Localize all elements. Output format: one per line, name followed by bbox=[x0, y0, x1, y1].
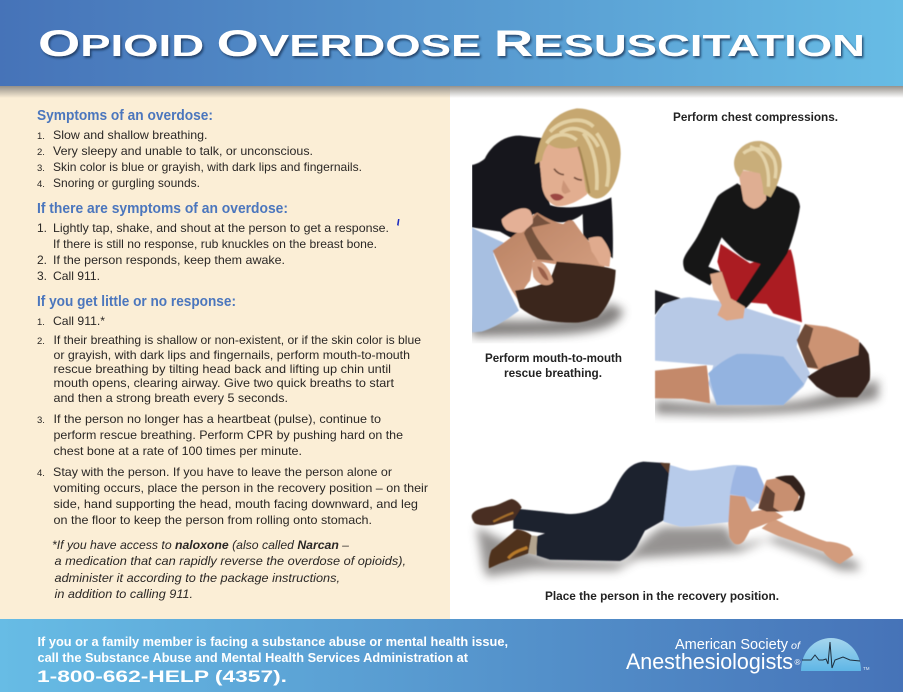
photo: mouth-to-mouth rescue breathing bbox=[472, 108, 623, 337]
stray blue mark bbox=[397, 219, 400, 226]
symptom list: 1. bbox=[37, 131, 45, 142]
caption: chest compressions: Perform chest compressions. bbox=[673, 112, 838, 124]
response list: 2. bbox=[37, 253, 47, 267]
heading: little or no response: If you get little or no response: bbox=[37, 294, 236, 310]
naloxone note: administer it according to the package instructions, bbox=[54, 571, 340, 585]
symptom list: 3. bbox=[37, 163, 45, 174]
section: little or no response bbox=[37, 294, 428, 527]
response list: If there is still no response, rub knuckles on the breast bone. bbox=[53, 237, 377, 251]
response list: If the person responds, keep them awake. bbox=[53, 253, 285, 267]
symptom list: 4. bbox=[37, 179, 45, 190]
helpline text: call the Substance Abuse and Mental Health Services Administration at bbox=[38, 650, 469, 665]
caption: mouth-to-mouth: rescue breathing. bbox=[504, 368, 602, 380]
rescuer hands bbox=[502, 208, 533, 233]
step 2: and then a strong breath every 5 seconds. bbox=[54, 391, 288, 405]
extended arm bbox=[762, 518, 853, 564]
patient belt bbox=[655, 290, 681, 315]
step 3: 3. bbox=[37, 415, 45, 426]
sleeve bbox=[730, 466, 764, 504]
patient ear bbox=[532, 261, 553, 285]
response list: Lightly tap, shake, and shout at the person to get a response. bbox=[53, 221, 389, 235]
step 4: on the floor to keep the person from rolling onto stomach. bbox=[54, 513, 372, 527]
patient hair bbox=[515, 262, 616, 323]
patient sleeve bbox=[708, 354, 804, 405]
step 2: 2. bbox=[37, 336, 45, 347]
photo: chest compressions bbox=[655, 141, 878, 415]
step 1: 1. bbox=[37, 317, 45, 328]
response list: 3. bbox=[37, 269, 47, 283]
rescuer face bbox=[539, 143, 587, 206]
title banner bbox=[0, 0, 903, 98]
rescuer hair bbox=[734, 141, 782, 197]
step 2: or grayish, with dark lips and fingernails, perform mouth-to-mouth bbox=[54, 348, 410, 362]
step 4: 4. bbox=[37, 468, 45, 479]
heading: symptoms: Symptoms of an overdose: bbox=[37, 108, 213, 124]
lower shoe bbox=[489, 529, 532, 568]
logo: American Society of Anesthesiologists: American Society bbox=[675, 637, 789, 653]
bent arm bbox=[728, 495, 783, 544]
logo: American Society of Anesthesiologists: ® bbox=[794, 658, 800, 667]
step 4: side, hand supporting the head, mouth facing downward, and leg bbox=[54, 497, 418, 511]
rescuer hands bbox=[710, 272, 745, 321]
step 3 bbox=[37, 412, 403, 458]
naloxone note: *If you have access to naloxone (also called Narcan – bbox=[52, 538, 349, 552]
step 2: If their breathing is shallow or non-existent, or if the skin color is blue bbox=[54, 333, 421, 347]
logo: American Society of Anesthesiologists: TM bbox=[863, 666, 870, 671]
heading: if there are symptoms: If there are symptoms of an overdose: bbox=[37, 201, 288, 217]
title: O PIOID O VERDOSE R ESUSCITATION bbox=[38, 23, 865, 64]
naloxone note bbox=[52, 538, 406, 601]
caption: mouth-to-mouth: Perform mouth-to-mouth bbox=[485, 353, 622, 365]
section: if there are symptoms bbox=[37, 201, 400, 283]
panel: symptoms and steps background bbox=[0, 86, 450, 619]
naloxone note: a medication that can rapidly reverse the overdose of opioids), bbox=[54, 554, 406, 568]
patient arm bbox=[655, 365, 710, 403]
step 4: vomiting occurs, place the person in the recovery position – on their bbox=[54, 481, 428, 495]
logo: American Society of Anesthesiologists: of bbox=[791, 640, 801, 652]
helpline text: 1-800-662-HELP (4357). bbox=[37, 668, 287, 686]
patient face bbox=[797, 324, 861, 371]
response list bbox=[37, 221, 389, 283]
symptom list: Slow and shallow breathing. bbox=[53, 128, 208, 142]
floor shadow bbox=[655, 380, 878, 415]
rescuer face bbox=[738, 170, 767, 209]
step 1: Call 911.* bbox=[53, 314, 105, 328]
logo dome with heartbeat bbox=[801, 638, 861, 671]
shirt bbox=[663, 465, 764, 527]
response list: 1. bbox=[37, 221, 47, 235]
step 4 bbox=[37, 465, 428, 527]
response list: Call 911. bbox=[53, 269, 100, 283]
belt bbox=[660, 463, 670, 475]
hair bbox=[775, 475, 805, 512]
patient shirt bbox=[655, 297, 810, 405]
photo: recovery position bbox=[472, 462, 860, 577]
patient hair bbox=[807, 342, 870, 397]
floor shadow bbox=[477, 527, 860, 577]
rescuer sweater bbox=[683, 183, 800, 309]
step 3: If the person no longer has a heartbeat (pulse), continue to bbox=[54, 412, 381, 426]
upper shoe bbox=[472, 499, 522, 525]
logo: American Society of Anesthesiologists: Anesthesiologists bbox=[626, 649, 793, 674]
step 2: rescue breathing by tilting head back and lifting up chin until bbox=[54, 362, 391, 376]
footer banner bbox=[0, 619, 903, 692]
step 2 bbox=[37, 333, 421, 405]
trousers bbox=[513, 462, 670, 561]
rescuer sweater bbox=[472, 136, 613, 258]
floor shadow bbox=[472, 303, 623, 337]
rescuer trousers bbox=[717, 244, 802, 322]
caption: mouth-to-mouth bbox=[485, 353, 622, 380]
symptom list: 2. bbox=[37, 147, 45, 158]
section: symptoms of an overdose bbox=[37, 108, 362, 190]
sock bbox=[528, 535, 537, 555]
helpline text bbox=[37, 634, 508, 686]
face bbox=[758, 477, 800, 512]
step 4: Stay with the person. If you have to leave the person alone or bbox=[53, 465, 392, 479]
logo: American Society of Anesthesiologists bbox=[626, 637, 870, 674]
step 2: mouth opens, clearing airway. Give two quick breaths to start bbox=[54, 376, 395, 390]
helpline text: If you or a family member is facing a substance abuse or mental health issue, bbox=[38, 634, 508, 649]
rescuer hair bbox=[535, 108, 621, 199]
symptom list: Snoring or gurgling sounds. bbox=[53, 176, 200, 190]
step 3: perform rescue breathing. Perform CPR by pushing hard on the bbox=[54, 428, 403, 442]
symptom list: Skin color is blue or grayish, with dark lips and fingernails. bbox=[53, 160, 362, 174]
patient face and neck bbox=[493, 213, 607, 299]
naloxone note: in addition to calling 911. bbox=[54, 587, 193, 601]
patient shirt bbox=[472, 228, 519, 332]
symptom list: Very sleepy and unable to talk, or unconscious. bbox=[53, 144, 313, 158]
caption: recovery position: Place the person in the recovery position. bbox=[545, 591, 779, 603]
step 3: chest bone at a rate of 100 times per minute. bbox=[54, 444, 302, 458]
symptom list bbox=[37, 128, 362, 190]
